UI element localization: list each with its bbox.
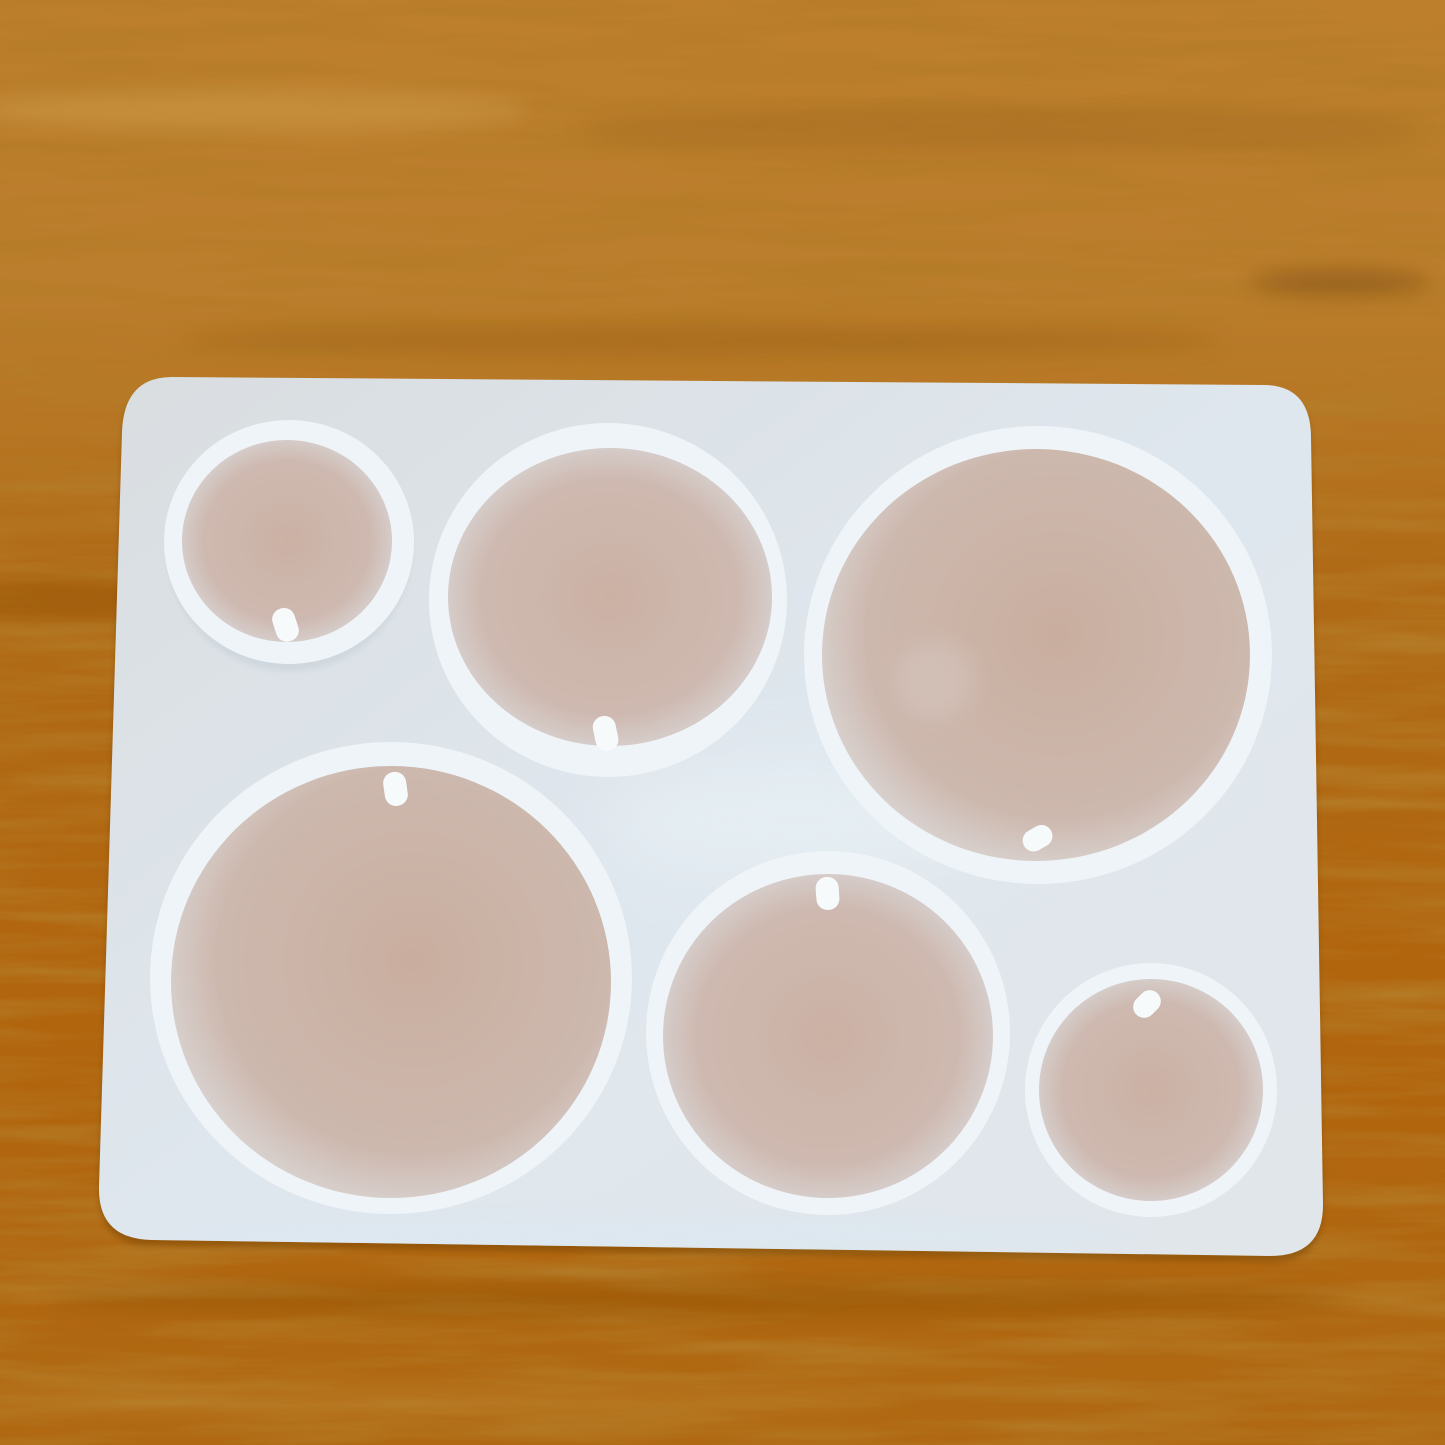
peg [382,770,409,807]
peg [815,876,840,911]
cavity: small top-left circle [164,420,414,671]
silicone mold tray [99,377,1323,1256]
cavity: largest bottom-left circle [150,742,632,1214]
cavity: medium bottom-center circle [646,851,1010,1215]
cavity: medium top-center circle [429,423,787,777]
peg [1019,821,1056,856]
peg [269,605,302,645]
mold shadow [99,383,1323,1262]
peg [591,714,620,753]
cavity: large top-right circle [804,426,1272,884]
cavity: small bottom-right circle [1025,963,1277,1217]
peg [1129,986,1165,1022]
